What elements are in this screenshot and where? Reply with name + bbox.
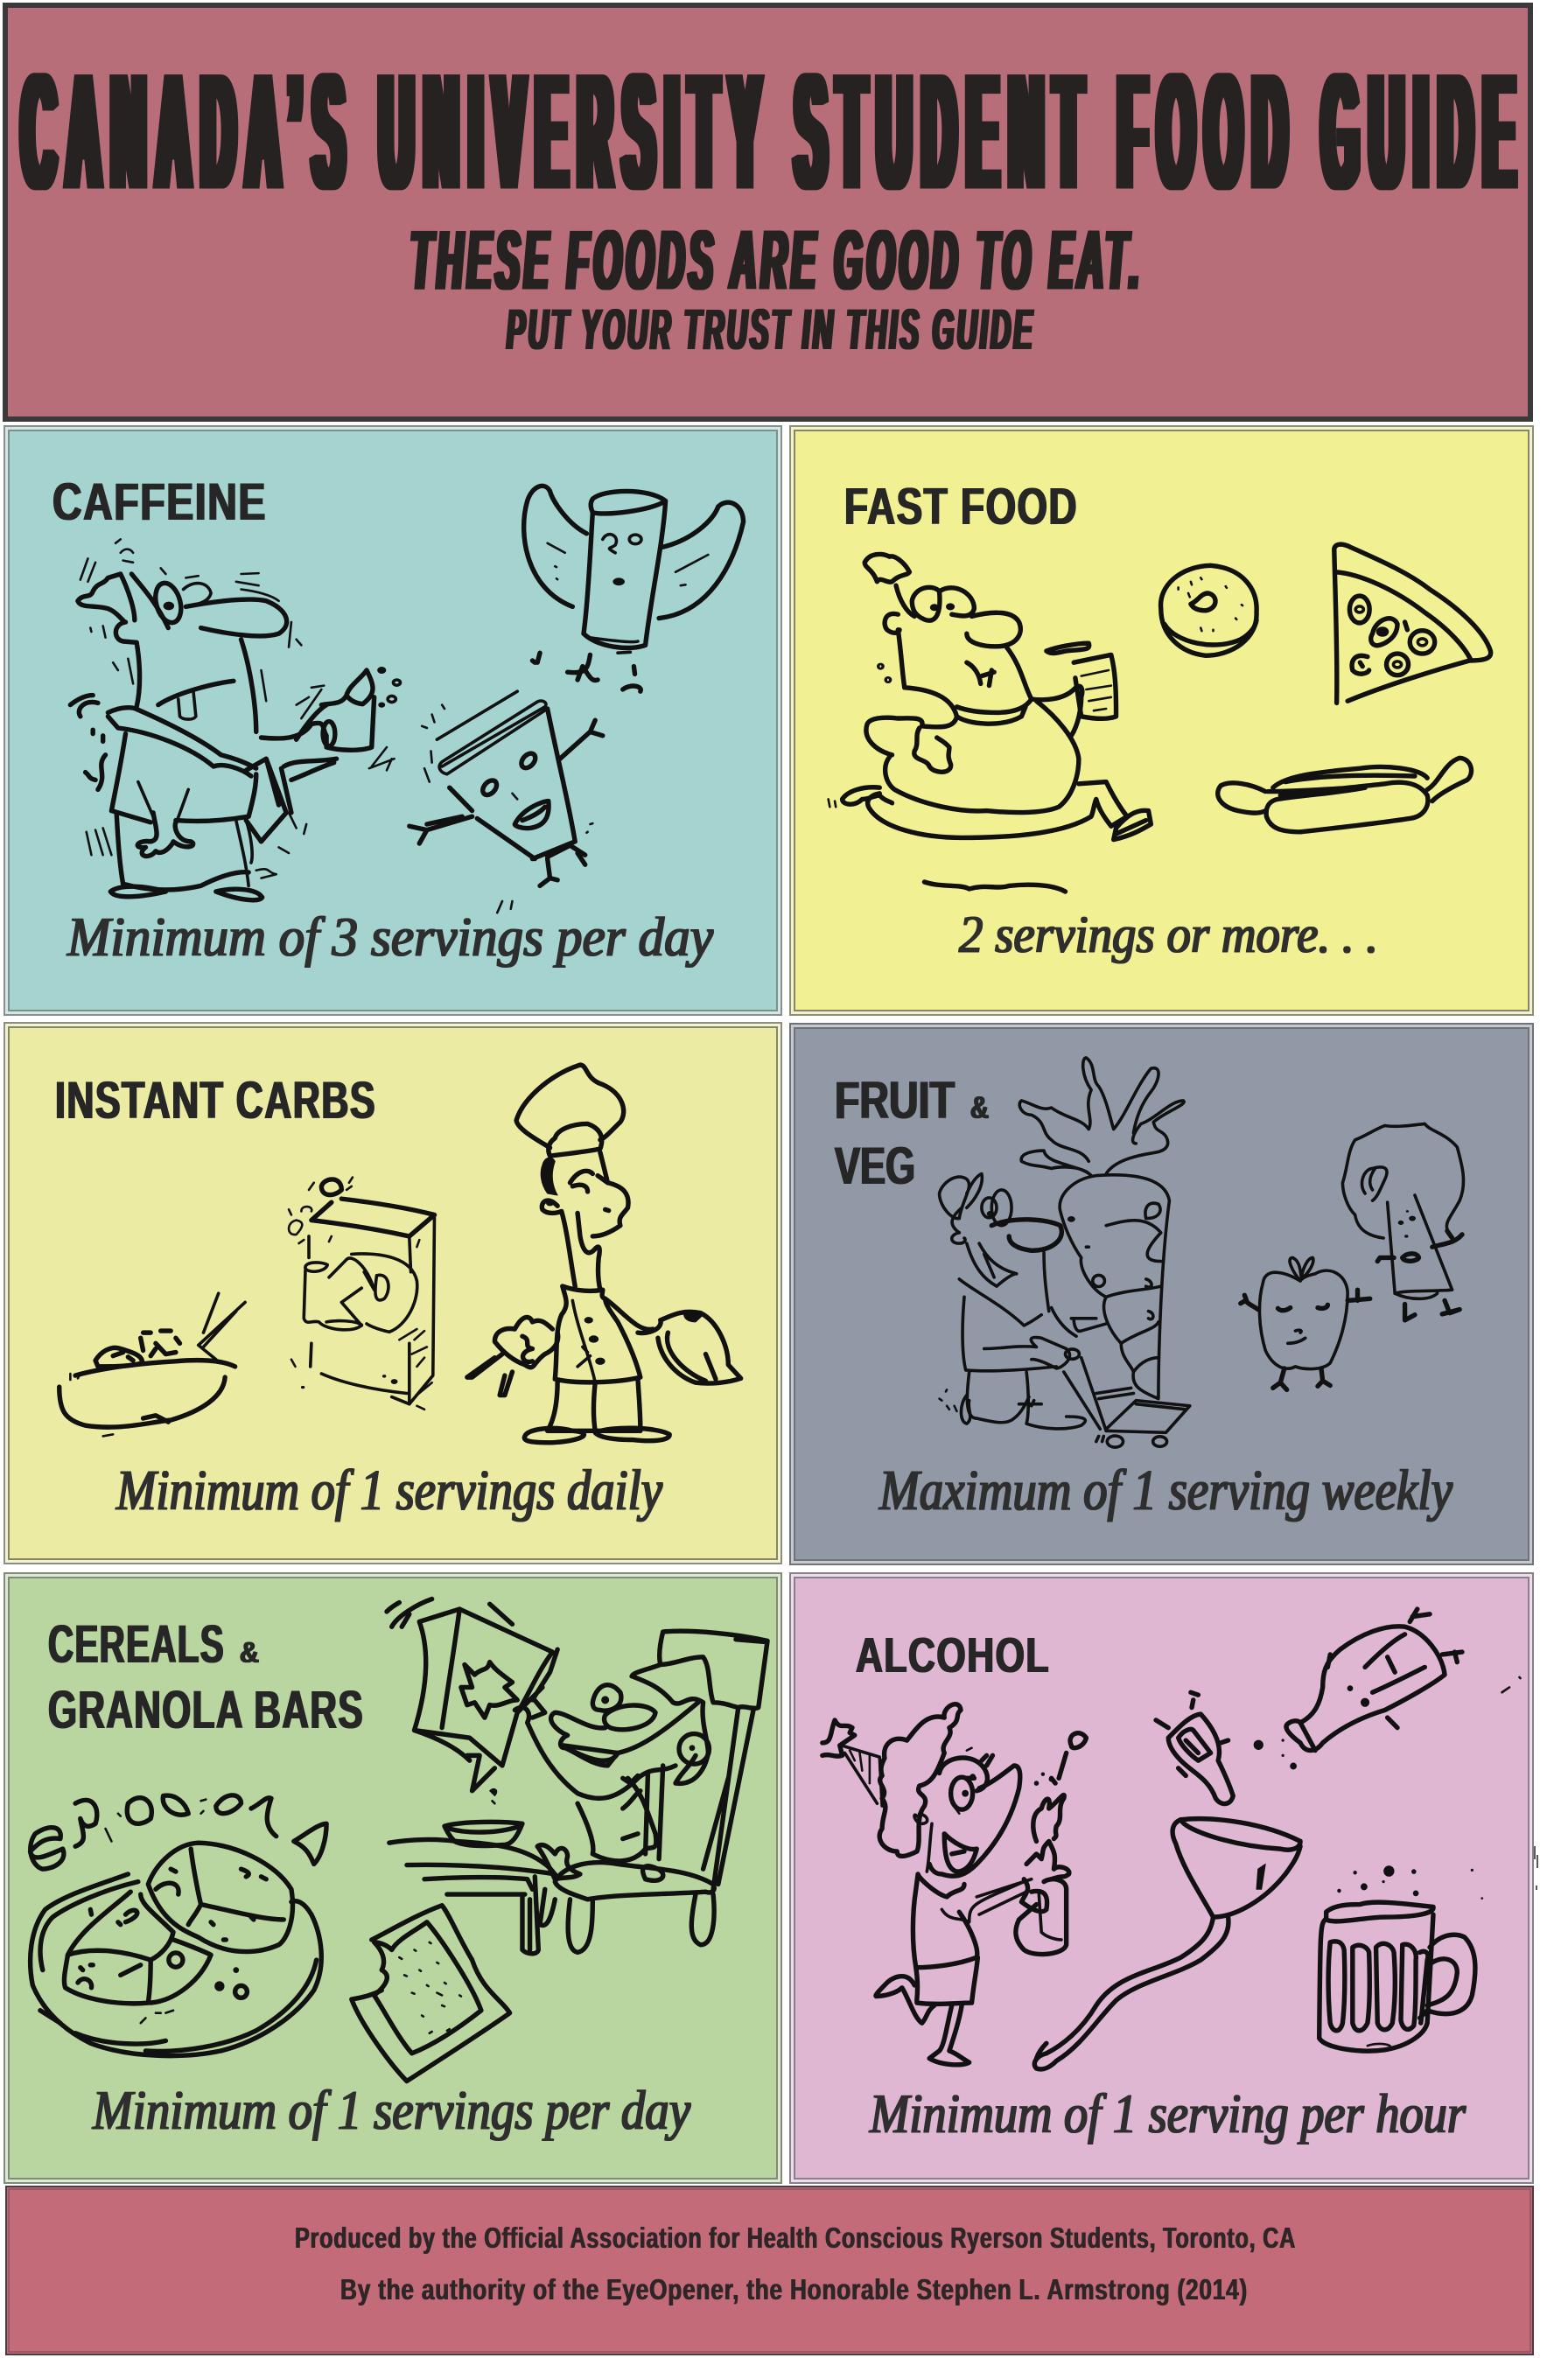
header panel <box>5 5 1530 419</box>
heading: fruit and veg: & <box>970 1089 989 1125</box>
caption: fast food: 2 servings or more. . . <box>959 906 1378 963</box>
icon: beer mug <box>1320 1866 1483 2051</box>
heading: cereals and granola bars: CEREALS <box>48 1614 225 1674</box>
panel: fruit and veg <box>790 1024 1533 1564</box>
heading: caffeine: CAFFEINE <box>52 472 267 531</box>
icon: donut <box>1161 565 1256 655</box>
icon: pizza slice <box>1334 544 1491 703</box>
heading: fast food: FAST FOOD <box>844 478 1078 535</box>
heading: cereals and granola bars <box>48 1614 364 1739</box>
heading: fruit and veg: VEG <box>835 1137 915 1195</box>
panel: alcohol <box>790 1573 1533 2183</box>
icon: granola bar <box>352 1906 510 2082</box>
panel: caffeine <box>4 426 781 1015</box>
heading: cereals and granola bars: GRANOLA BARS <box>48 1680 364 1739</box>
caption: instant carbs: Minimum of 1 servings daily <box>116 1459 663 1522</box>
icon: falling bottles <box>1156 1609 1521 1804</box>
icon: granola plate <box>30 1795 326 2056</box>
heading: alcohol: ALCOHOL <box>856 1627 1050 1683</box>
icon: man with giant carrot <box>940 1058 1190 1447</box>
panel: cereals and granola bars <box>4 1573 781 2183</box>
heading: fruit and veg: FRUIT <box>835 1071 955 1130</box>
heading: fruit and veg <box>835 1071 989 1195</box>
stray marks <box>1535 1846 1537 1890</box>
heading: cereals and granola bars: & <box>240 1636 259 1669</box>
icon: winged coffee cup <box>524 486 744 691</box>
icon: noodle bowl <box>60 1293 245 1436</box>
panel: instant carbs <box>4 1023 781 1564</box>
icon: chef <box>467 1065 741 1443</box>
footer panel <box>6 2187 1533 2355</box>
icon: boy eating cereal <box>387 1599 767 1954</box>
heading: instant carbs: INSTANT CARBS <box>55 1071 376 1130</box>
icon: hot dog <box>1218 758 1471 832</box>
icon: beer funnel <box>1034 1819 1300 2069</box>
caption: fruit and veg: Maximum of 1 serving weekly <box>878 1459 1453 1522</box>
icon: happy coffee cup <box>410 691 603 913</box>
icon: cereal box <box>289 1178 435 1410</box>
caption: caffeine: Minimum of 3 servings per day <box>66 906 714 968</box>
icon: partying woman <box>822 1704 1086 2065</box>
icon: broccoli character <box>1342 1123 1464 1320</box>
panel: fast food <box>790 426 1533 1015</box>
footer line: authority: By the authority of the EyeOpener, the Honorable Stephen L. Armstrong (2014) <box>340 2273 1248 2306</box>
caption: alcohol: Minimum of 1 serving per hour <box>869 2082 1466 2145</box>
icon: running man with drink <box>829 554 1151 892</box>
icon: shaking man with coffee <box>70 539 400 900</box>
icon: apple character <box>1241 1257 1370 1389</box>
caption: cereals and granola bars: Minimum of 1 servings per day <box>92 2079 691 2141</box>
